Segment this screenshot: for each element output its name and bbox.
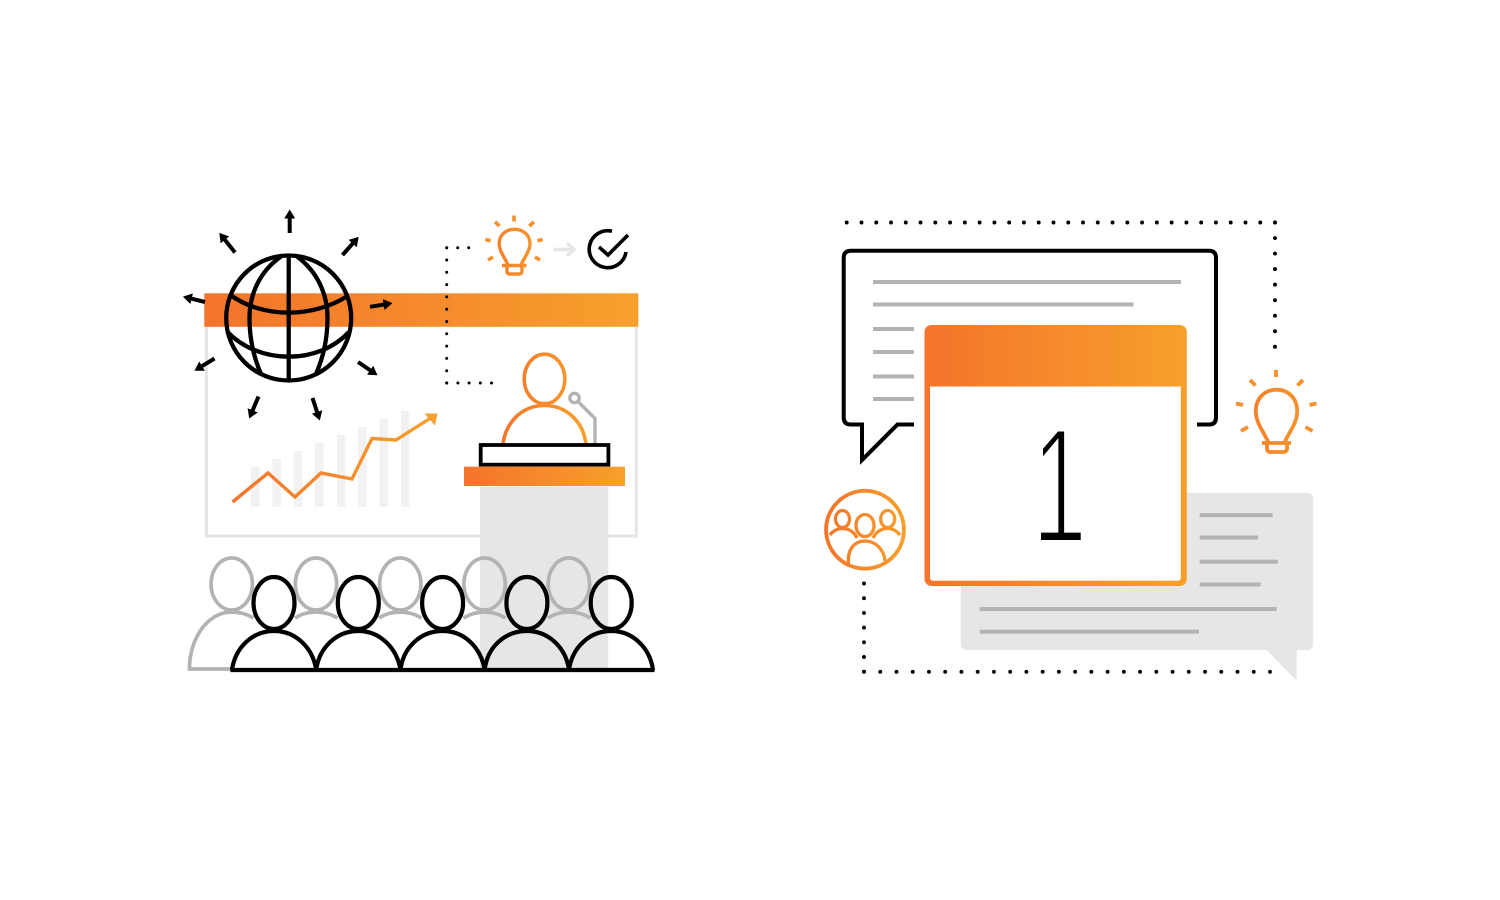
bubble text lines [873, 280, 1181, 401]
dotted connector top right [847, 222, 1276, 347]
calendar body [930, 386, 1181, 581]
bar chart [251, 411, 410, 507]
panel: presentation scene [189, 216, 654, 670]
panel: calendar and speech bubbles scene [826, 222, 1316, 681]
speaker at podium [464, 354, 625, 486]
speaker figure [503, 354, 586, 444]
grey bubble text lines [980, 513, 1278, 634]
calendar page [924, 325, 1187, 586]
arrow: bulb to check [554, 243, 574, 256]
audience [189, 558, 654, 670]
lectern top [481, 445, 608, 465]
icon: check mark circle [589, 231, 628, 268]
dotted connector [447, 248, 493, 384]
presentation screen frame [206, 320, 636, 536]
icon: light bulb small [485, 216, 543, 274]
back row audience [189, 558, 590, 669]
dotted connector bottom left [864, 584, 1270, 672]
black outlined speech bubble [844, 251, 1216, 460]
calendar number: 1 [1032, 393, 1087, 578]
podium column [480, 487, 608, 670]
lectern orange bar [464, 467, 625, 486]
globe with radiating arrows [191, 218, 384, 412]
radiating arrows [191, 218, 384, 412]
icon: audience circle [826, 491, 904, 569]
globe [226, 256, 351, 380]
icon: light bulb large [1236, 370, 1316, 452]
rising trend line arrow [232, 414, 438, 502]
calendar frame and header [924, 325, 1187, 586]
front row audience [230, 577, 654, 670]
orange screen header band [204, 293, 638, 327]
microphone [570, 393, 595, 444]
grey speech bubble [961, 493, 1313, 681]
